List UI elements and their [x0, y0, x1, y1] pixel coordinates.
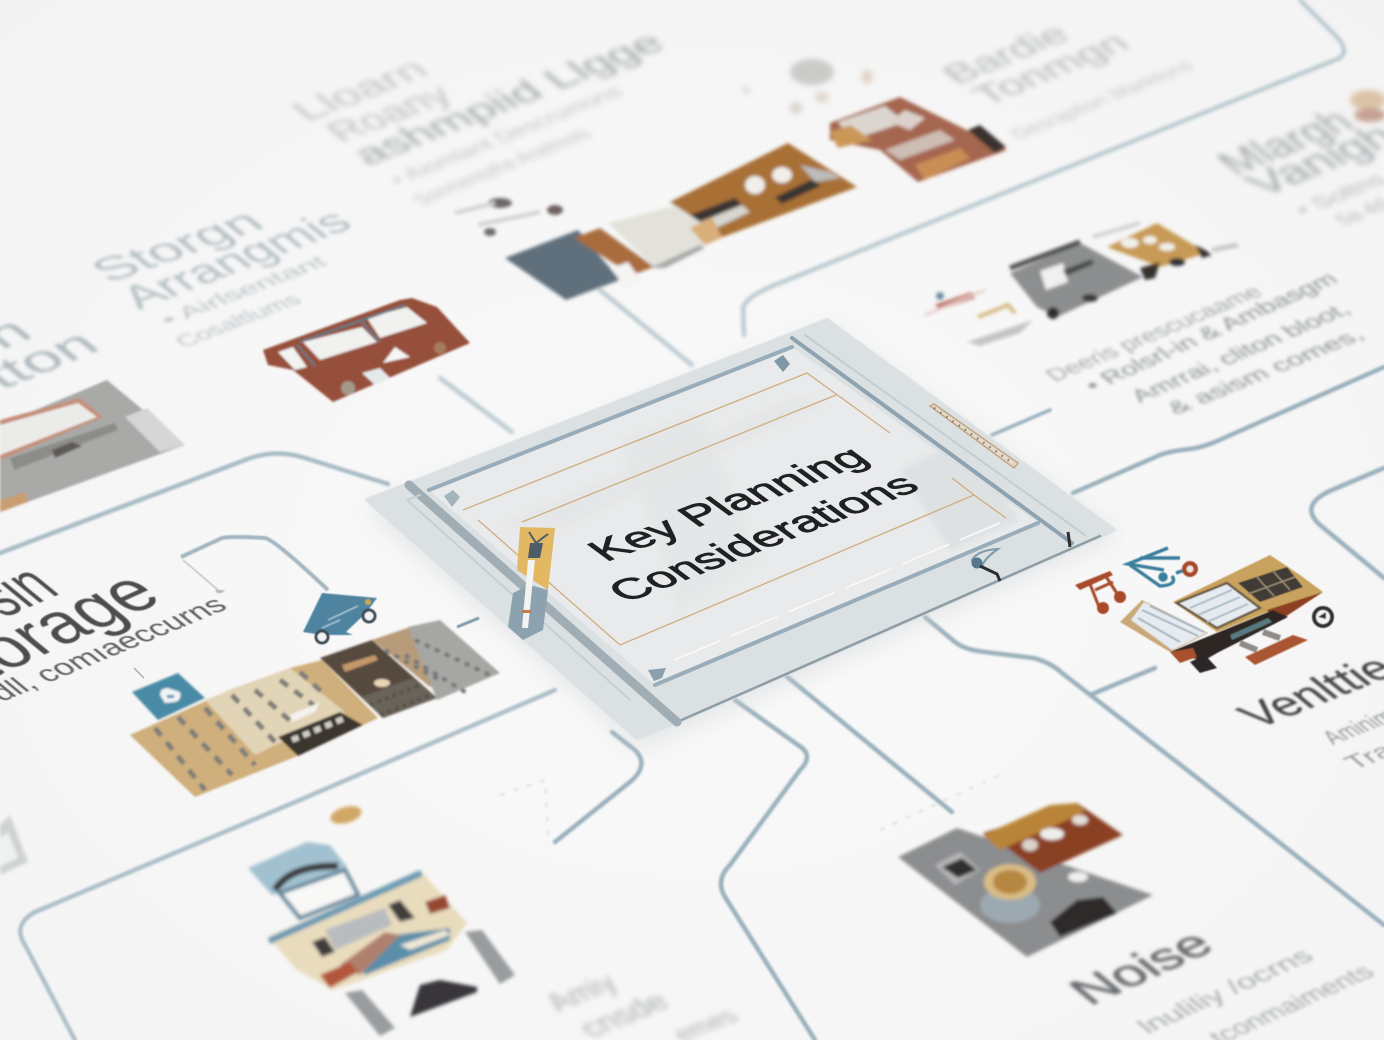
- tick mark: [134, 668, 144, 678]
- icon: ventilation building: [1075, 548, 1332, 673]
- description: noise: [1131, 945, 1381, 1040]
- icon: top faint sketches: [742, 59, 873, 114]
- description: top centre: [385, 83, 628, 209]
- text block: right panel description: Amrrai, cliton bloot,: [1125, 299, 1356, 406]
- card shadow around central plaque: [367, 330, 1120, 750]
- description: top centre: • Aiomlant Descrumons: [385, 83, 628, 189]
- pin and stem: [972, 549, 1000, 581]
- description text: Cosaltlums: [170, 290, 307, 351]
- description: ventilation: [1316, 704, 1384, 774]
- icon: right panel grey building: [1010, 223, 1238, 319]
- icon: blue arrows: [1128, 548, 1185, 586]
- heading: top centre: Lloarn: [281, 53, 438, 127]
- icon: top-left grey building: [0, 380, 185, 512]
- icon: bottom-left building: [248, 803, 515, 1036]
- description: far right: • Soltns: [1290, 170, 1384, 219]
- icon: music note: [1075, 571, 1126, 614]
- icon: dark ring: [1314, 608, 1332, 626]
- text block: bottom-left description: [537, 968, 744, 1040]
- panel: central plaque: [367, 320, 1114, 738]
- corner black tick: [1068, 532, 1070, 547]
- text block: bottom-left description: Amiy: [537, 968, 627, 1016]
- description text: [155, 253, 333, 351]
- title: Key Planning: [578, 441, 878, 567]
- connector lines and panel outlines, far: [440, 0, 1344, 432]
- heading: top right: Bardie: [934, 19, 1079, 90]
- icon: noise building: [898, 803, 1153, 957]
- icon: left-edge fragment: [0, 815, 28, 875]
- description: noise: lnuliliy /ocrns: [1131, 945, 1320, 1038]
- panel: top-right text: [934, 19, 1384, 229]
- text block: right panel description: [1040, 269, 1370, 418]
- heading: storage arrangements: Arrangmis: [109, 202, 362, 316]
- icon: red dial: [1182, 561, 1198, 577]
- heading: storage arrangements: Storgn: [79, 203, 274, 289]
- heading: top right: [934, 19, 1138, 111]
- description: far right: [1290, 170, 1384, 229]
- panel: top-centre text: [281, 26, 674, 209]
- icon: blue sign: [132, 673, 205, 720]
- icon: pencil: [508, 527, 555, 640]
- heading: top centre: [281, 26, 674, 171]
- faint dashed marks: [500, 775, 1000, 835]
- heading: top right: Tonmgn: [964, 28, 1138, 111]
- heading: far right: [1207, 102, 1384, 203]
- description: top centre: Sonmentsthe Anetmots: [408, 125, 597, 209]
- panel: noise text: [1058, 922, 1381, 1040]
- panel: ventilation text: [1228, 649, 1384, 774]
- heading: far right: Mlargh: [1207, 102, 1364, 182]
- plaque inner surface: [429, 347, 1038, 685]
- description text: • Airlsentant: [155, 253, 333, 329]
- heading: top centre: ashmpiid Llgge: [342, 26, 674, 171]
- heading: storage arrangements: [79, 202, 362, 316]
- ruler: [930, 404, 1018, 468]
- description: top right: Desraplion Marktons: [1006, 57, 1200, 143]
- icon: top-right red building: [830, 97, 1007, 182]
- title: Considerations: [598, 468, 929, 608]
- icon: top building row: [505, 143, 857, 300]
- plaque base: [367, 320, 1114, 738]
- connector lines and panel outlines, near: [0, 367, 1384, 1040]
- text block: right panel description: Deeris prescucaame: [1040, 282, 1268, 385]
- title: [578, 441, 929, 608]
- text block: right panel description: & asism comes,: [1161, 325, 1370, 418]
- white dashes: [674, 523, 1000, 660]
- panel: left basin storage: [0, 537, 500, 797]
- connector stub: [457, 618, 479, 627]
- heading: noise: Noise: [1058, 922, 1224, 1012]
- arrow: bracket connector: [181, 537, 328, 593]
- corner diamonds: [444, 355, 790, 681]
- icon: tan building row: [130, 620, 500, 797]
- heading: top centre: Roany: [316, 78, 462, 148]
- panel: top-left storage text: [0, 202, 362, 396]
- heading fragment left edge: [0, 310, 110, 396]
- icon: top small icons: [455, 198, 563, 236]
- gold inner border: [463, 373, 1006, 645]
- plaque frame lines: [407, 335, 1100, 722]
- text block: right panel description: • Rolsrl-in & Ambasgm: [1079, 269, 1343, 395]
- icon: right panel small tools: [925, 290, 1033, 346]
- icon: red storage building: [263, 298, 470, 402]
- icon: top-right corner fragment: [1350, 90, 1384, 122]
- icon: blue vehicle: [303, 593, 377, 643]
